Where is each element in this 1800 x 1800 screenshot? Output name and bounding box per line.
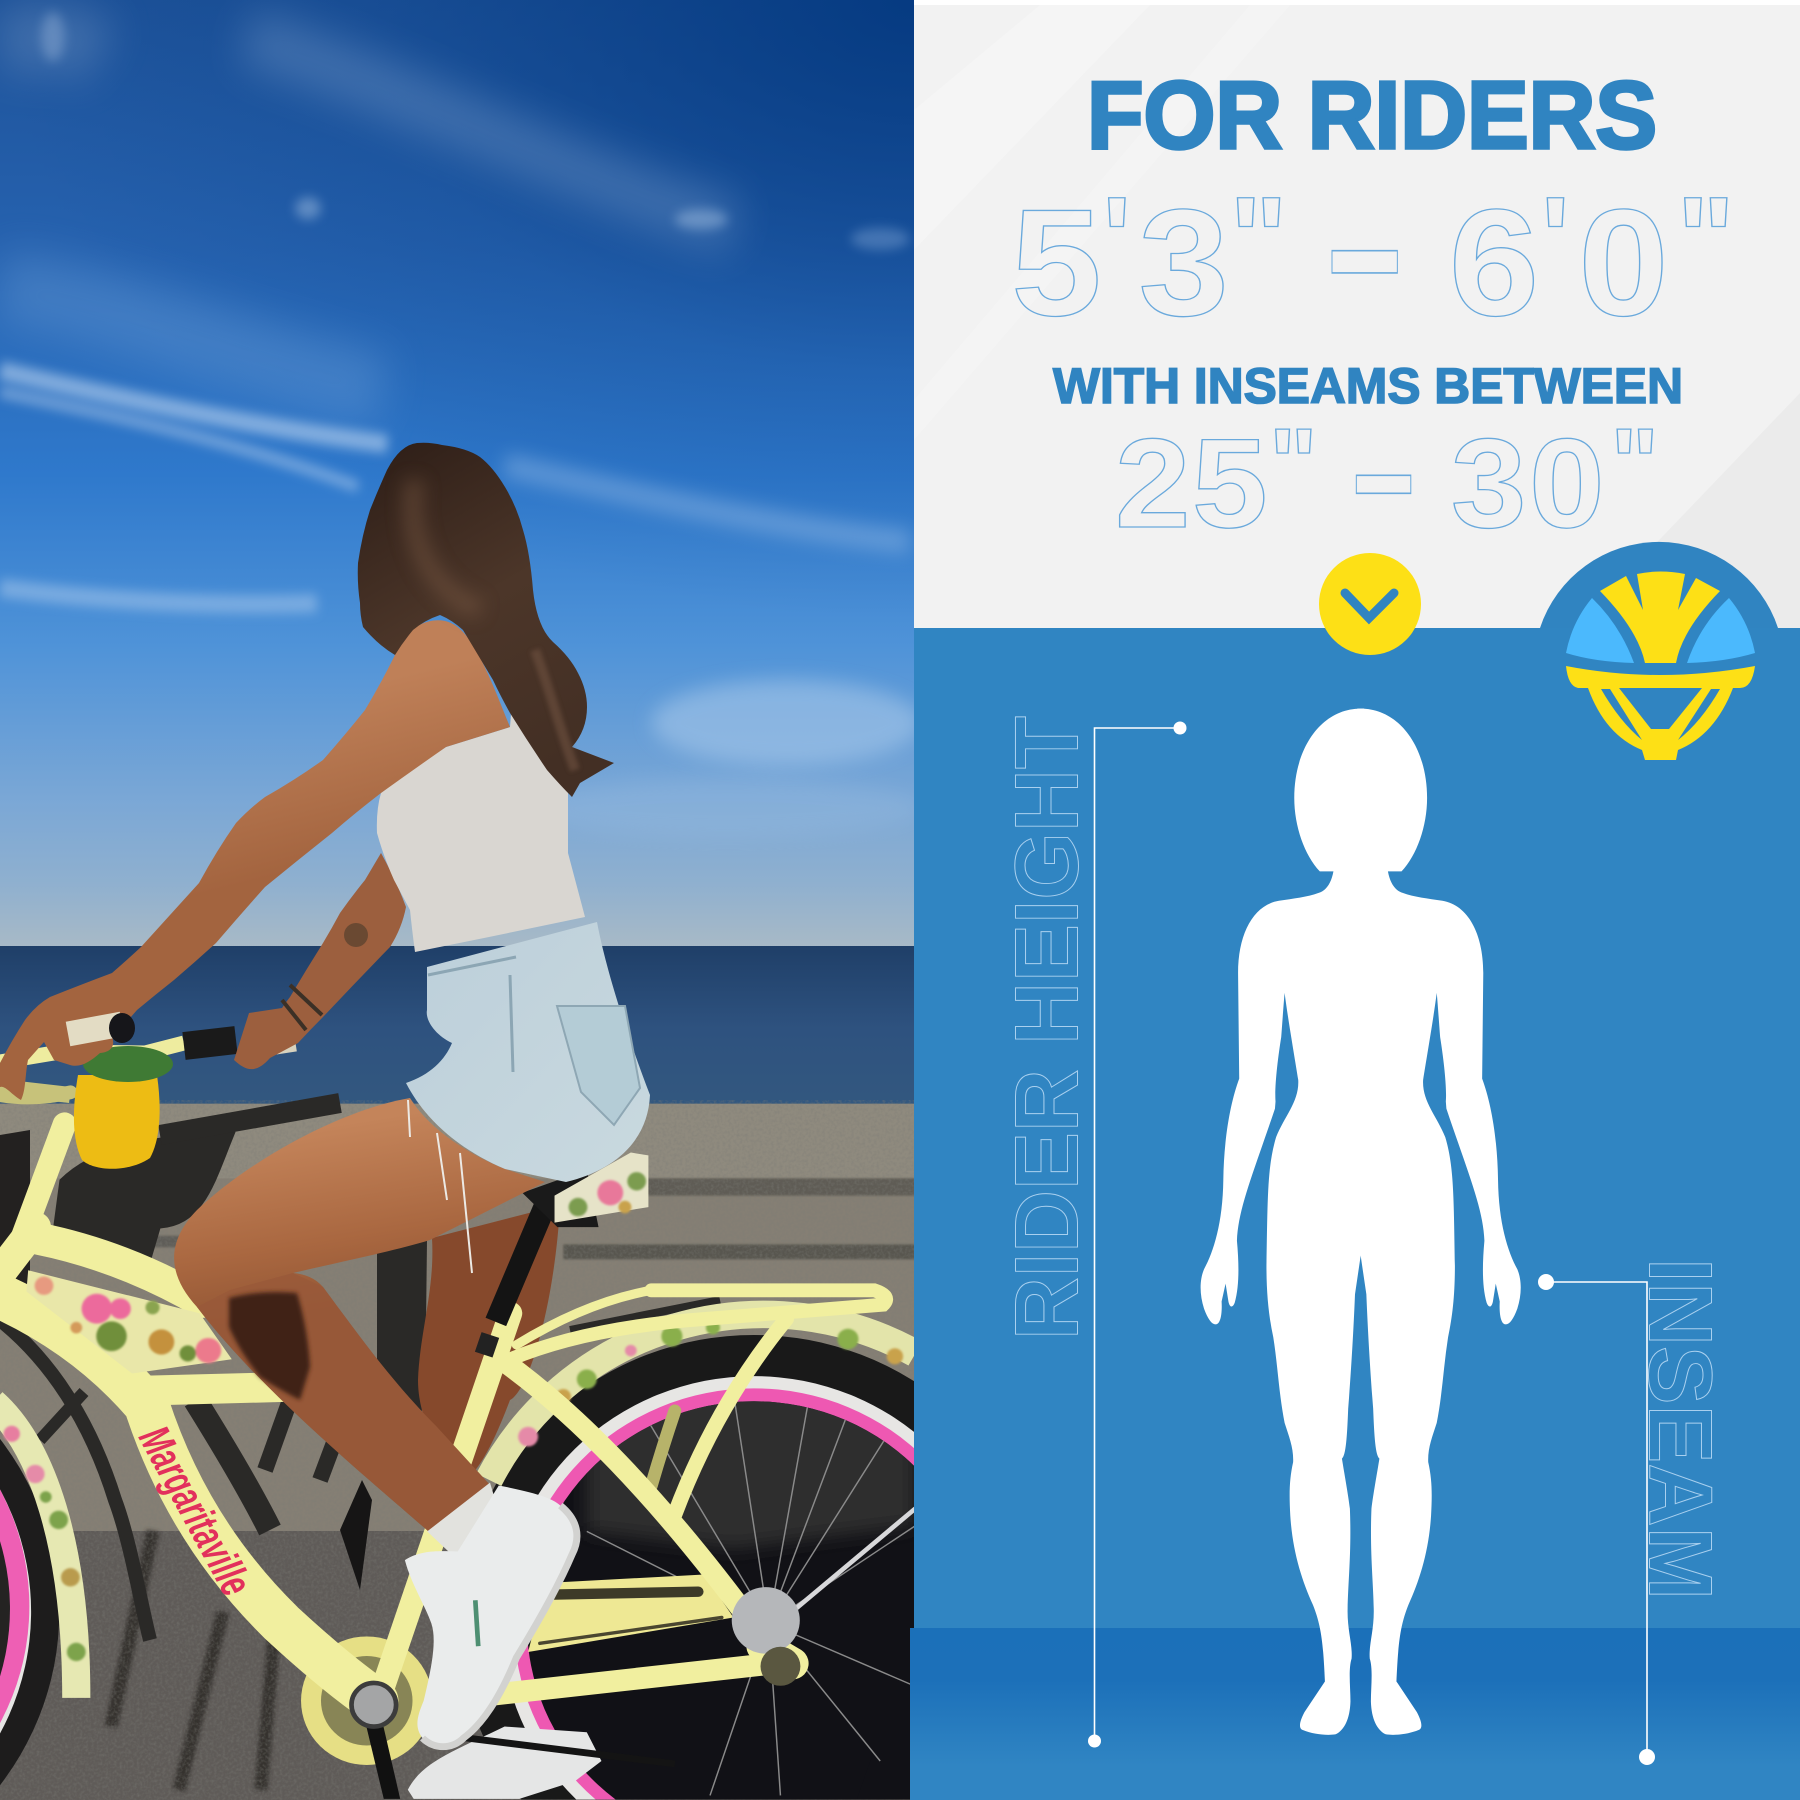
handlebar and shifter <box>0 1040 296 1095</box>
floor band <box>910 1628 1800 1800</box>
inseam measure line <box>1538 1274 1655 1765</box>
far shoe <box>408 1727 601 1799</box>
far leg <box>418 1205 560 1480</box>
icon: yellow down chevron badge <box>1319 553 1421 655</box>
seat tube collar <box>478 1342 496 1348</box>
outlined height range: 6 <box>1449 179 1539 348</box>
outlined inseam range: " <box>1610 409 1659 516</box>
outlined height range: " <box>1229 174 1288 302</box>
panel: blue sizing background <box>914 628 1800 1800</box>
heading: for riders: FOR RIDERS <box>1087 62 1657 169</box>
sock and near shoe <box>405 1483 577 1747</box>
outlined inseam range <box>1115 369 1659 572</box>
rear hub <box>732 1587 800 1686</box>
wall speckle texture <box>0 1105 914 1800</box>
helmet brim <box>1566 666 1755 688</box>
icon: bicycle helmet badge <box>1540 542 1778 760</box>
outlined height range: 0 <box>1578 179 1669 348</box>
sea <box>0 946 914 1111</box>
bike shadows on wall <box>0 1103 720 1640</box>
sky <box>0 0 914 950</box>
helmet left vent <box>1566 598 1634 663</box>
outlined inseam range: 0 <box>1529 412 1605 554</box>
outlined height range: 5 <box>1011 179 1102 348</box>
pavement <box>0 1531 914 1800</box>
outlined height range: ' <box>1102 174 1131 302</box>
seat post <box>496 1204 546 1322</box>
helmet chin straps <box>1588 688 1733 760</box>
outlined height range: ' <box>1541 174 1570 302</box>
front wheel and fender <box>0 1392 90 1785</box>
frame tubes <box>0 1092 792 1701</box>
label: rider height: RIDER HEIGHT <box>998 716 1098 1340</box>
tank top <box>376 714 585 952</box>
clouds <box>0 12 921 839</box>
label: inseam: INSEAM <box>1630 1258 1730 1600</box>
pineapple cup <box>74 1046 173 1169</box>
Margaritaville frame lettering: Margaritaville <box>129 1419 261 1604</box>
chainring and chain guard <box>301 1574 734 1765</box>
floral frame panel <box>26 1270 232 1374</box>
long brown hair <box>358 443 614 797</box>
near leg <box>174 1098 545 1531</box>
figure: white female body silhouette <box>1201 709 1521 1735</box>
rider height measure line <box>1088 722 1186 1748</box>
outlined height range: – <box>1328 120 1401 371</box>
crank and pedal <box>349 1680 600 1799</box>
subheading: with inseams between: WITH INSEAMS BETWEEN <box>1053 358 1683 414</box>
handlebar grip <box>68 1013 135 1043</box>
rack <box>511 1290 886 1514</box>
denim shorts <box>406 922 650 1273</box>
sea wall <box>0 1104 915 1534</box>
outlined height range <box>1011 120 1735 371</box>
far arm and hand <box>234 853 406 1069</box>
outlined inseam range: 3 <box>1451 412 1527 554</box>
rear wheel <box>478 1300 914 1800</box>
outlined inseam range: " <box>1269 409 1318 516</box>
bicycle frame <box>0 1092 886 1765</box>
panel: light header background <box>914 5 1800 628</box>
outlined inseam range: 5 <box>1192 412 1268 554</box>
helmet crown <box>1600 572 1720 663</box>
outlined inseam range: – <box>1353 369 1414 572</box>
helmet right vent <box>1687 598 1755 663</box>
panel: photo of rider on cruiser bike <box>0 0 914 1800</box>
outlined inseam range: 2 <box>1115 412 1191 554</box>
floral saddle <box>522 1153 648 1227</box>
outlined height range: " <box>1677 174 1735 302</box>
near arm and shoulder <box>0 620 510 1100</box>
outlined height range: 3 <box>1138 179 1229 348</box>
